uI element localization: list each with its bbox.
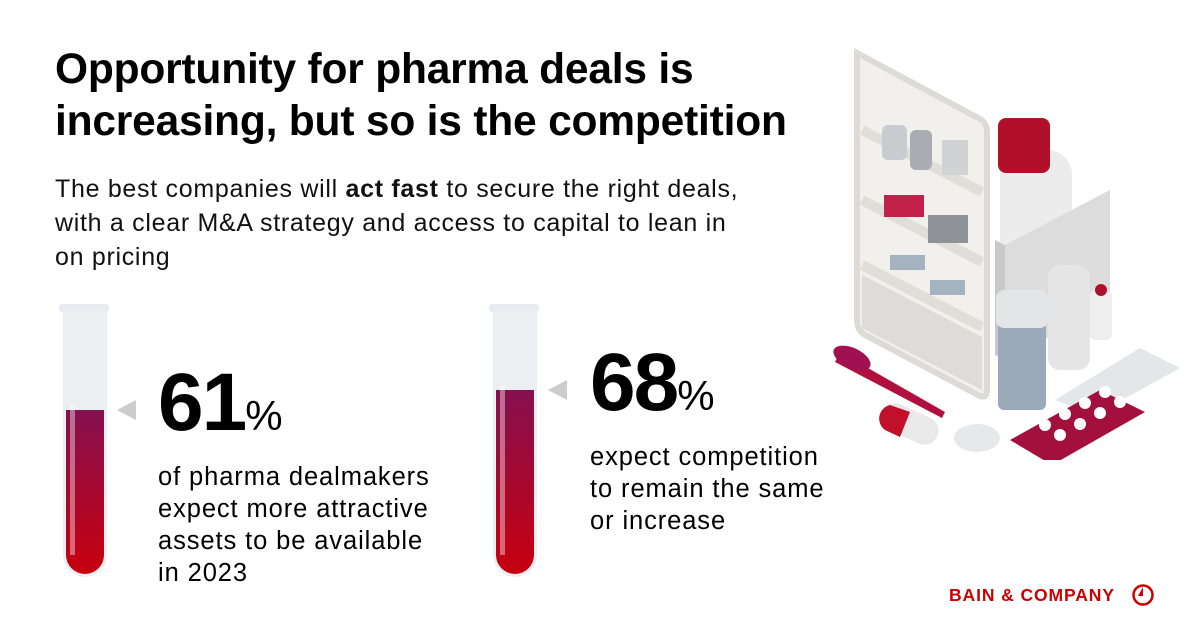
pointer 2 — [548, 380, 567, 400]
stat 2 — [590, 337, 824, 535]
stat 1: assets to be available — [158, 527, 423, 555]
stat 1: expect more attractive — [158, 495, 429, 523]
thermometer — [830, 340, 945, 418]
stat 2: or increase — [590, 507, 726, 535]
subtitle: on pricing — [55, 243, 170, 271]
stat 2: to remain the same — [590, 475, 824, 503]
stat 1: 61% — [158, 357, 283, 448]
capsule — [877, 399, 943, 449]
logo icon — [1132, 584, 1154, 606]
subtitle — [55, 175, 738, 271]
test tube 2 — [489, 304, 539, 577]
stat 1: of pharma dealmakers — [158, 463, 430, 491]
pointer 1 — [117, 400, 136, 420]
stat 1: in 2023 — [158, 559, 248, 587]
subtitle: The best companies will act fast to secure the right deals, — [55, 175, 738, 203]
title: Opportunity for pharma deals is — [55, 46, 693, 93]
subtitle: with a clear M&A strategy and access to capital to lean in — [55, 209, 726, 237]
title: increasing, but so is the competition — [55, 98, 787, 145]
stat 1 — [158, 357, 430, 587]
title — [55, 46, 787, 145]
box — [995, 190, 1110, 360]
test tube 1 — [59, 304, 109, 577]
tablet — [954, 424, 1000, 452]
stat 2: expect competition — [590, 443, 819, 471]
big bottle — [998, 118, 1072, 330]
pill bottle — [996, 290, 1048, 410]
phone — [857, 53, 987, 397]
illustration: pharmacy phone and medicines — [833, 48, 1180, 460]
blister packs — [1010, 348, 1180, 465]
logo: BAIN & COMPANY — [949, 585, 1115, 605]
stat 2: 68% — [590, 337, 715, 428]
